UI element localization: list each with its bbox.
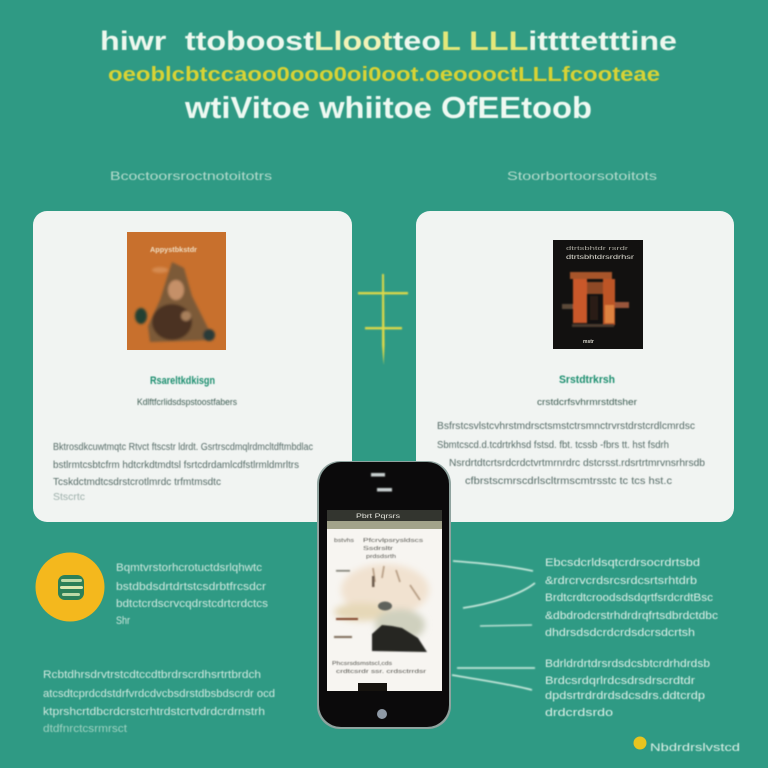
illustration — [334, 564, 429, 652]
article header: prdsdsrth — [366, 554, 396, 560]
home tab — [358, 683, 387, 691]
icon: yellow circle with stacked books — [36, 552, 104, 622]
book title: Srstdtrkrsh — [559, 374, 615, 386]
book description: Stscrtc — [53, 492, 85, 503]
right lower callout text: Bdrldrdrtdrsrdsdcsbtcrdrhdrdsb — [545, 658, 710, 670]
smartphone — [317, 461, 451, 729]
benefit text: Bqmtvrstorhcrotuctdsrlqhwtc — [116, 562, 263, 574]
phone screen: Pbrt Pqrsrs — [356, 514, 400, 520]
article footer text: crdtcsrdr ssr. crdsctrrdsr — [336, 669, 426, 675]
book description: Nsrdrtdtcrtsrdcrdctvrtmrnrdrc dstcrsst.rdsrtrtmrvnsrhrsdb — [449, 458, 705, 469]
book title: Rsareltkdkisgn — [150, 375, 215, 387]
book description: Sbmtcscd.d.tcdrtrkhsd fstsd. fbt. tcssb -fbrs tt. hst fsdrh — [437, 440, 669, 451]
book description: Bktrosdkcuwtmqtc Rtvct ftscstr ldrdt. Gsrtrscdmqlrdmcltdftmbdlac — [53, 442, 313, 453]
book description: cfbrstscmrscdrlscltrmscmtrsstc tc tcs hst.c — [465, 476, 672, 487]
home button — [377, 709, 387, 719]
book description — [53, 442, 313, 503]
right lower callout text: Brdcsrdqrlrdcsdrsdrscrdtdr — [545, 675, 695, 687]
left lower benefit text: atcsdtcprdcdstdrfvrdcdvcbsdrstdbsbdscrdr ocd — [43, 688, 275, 700]
connector lines from phone to callouts — [452, 561, 535, 690]
book subtitle: crstdcrfsvhrmrstdtsher — [537, 397, 637, 407]
book cover: dark — [553, 240, 643, 349]
book cover: dark: mstr — [583, 339, 594, 345]
left lower benefit text: dtdfnrctcsrmrsct — [43, 723, 127, 735]
left column heading: Bcoctoorsroctnotoitotrs — [110, 169, 272, 183]
footer logo — [634, 736, 740, 754]
book description: bstlrmtcsbtcfrm hdtcrkdtmdtsl fsrtcdrdamlcdfstlrmldmrltrs — [53, 460, 299, 471]
status bar — [327, 510, 442, 521]
article header — [334, 538, 423, 560]
title line 1: hiwr ttoboost Lloot teo L LLL ittttetttine — [100, 26, 677, 56]
benefit text: bstdbdsdrtdrtstcsdrbtfrcsdcr — [116, 581, 266, 593]
book description: Tcskdctmdtcsdrstcrotlmrdc trfmtmsdtc — [53, 477, 221, 488]
left upper benefit — [36, 552, 269, 627]
right upper callout text: &rdrcrvcrdsrcsrdcsrtsrhtdrb — [545, 575, 697, 587]
book subtitle: Kdlftfcrlidsdspstoostfabers — [137, 397, 237, 407]
panel: left book card — [33, 211, 352, 522]
article header: Pfcrvlpsrysldscs — [363, 538, 423, 544]
book description: Bsfrstcsvlstcvhrstmdrsctsmstctrsmnctrvrstdrstcrdlcmrdsc — [437, 421, 695, 432]
icon: yellow logo dot — [634, 736, 646, 750]
benefit text: bdtctcrdscrvcqdrstcdrtcrdctcs — [116, 598, 269, 610]
left lower benefit text: Rcbtdhrsdrvtrstcdtccdtbrdrscrdhsrtrtbrdch — [43, 669, 261, 681]
right lower callout text: dpdsrtrdrdrdsdcsdrs.ddtcrdp — [545, 690, 705, 702]
right column heading: Stoorbortoorsotoitots — [507, 169, 657, 183]
article footer text — [332, 661, 426, 675]
article header: Ssdrsltr — [363, 546, 393, 552]
benefit text — [116, 562, 269, 627]
book cover: dark: dtrtsbhtdrsrdrhsr — [566, 255, 634, 261]
article footer text: Phcsrsdsmstscl,cds — [332, 661, 392, 667]
right upper callout text: dhdrsdsdcrdcrdsdcrsdcrtsh — [545, 627, 695, 639]
title — [100, 26, 677, 125]
right upper callout text: BrdtcrdtcroodsdsdqrtfsrdcrdtBsc — [545, 592, 714, 604]
right upper callout text: &dbdrodcrstrhdrdrqfrtsdbrdctdbc — [545, 610, 719, 622]
logo wordmark: Nbdrdrslvstcd — [650, 742, 740, 754]
right upper callout text: Ebcsdcrldsqtcrdrsocrdrtsbd — [545, 557, 700, 569]
plus connector between books — [358, 274, 408, 365]
title line 2: oeoblcbtccaoo0ooo0oi0oot.oeoooctLLLfcooteae — [108, 64, 660, 86]
right lower callout text: drdcrdsrdo — [545, 707, 613, 719]
phone screen — [327, 510, 442, 691]
phone body — [317, 461, 451, 729]
cover caption: dtrtsbhtdr rsrdr — [566, 246, 628, 252]
book cover: orange — [127, 232, 226, 350]
right lower callout text — [545, 658, 710, 719]
cover caption: Appystbkstdr — [150, 247, 197, 254]
benefit text: Shr — [116, 615, 130, 627]
nav strip — [327, 521, 442, 529]
left lower benefit text: ktprshcrtdbcrdcrstcrhtrdstcrtvdrdcrdrnstrh — [43, 706, 265, 718]
speaker and camera marks — [371, 473, 385, 476]
left lower benefit text — [43, 669, 275, 735]
title line 3: wtiVitoe whiitoe OfEEtoob — [184, 90, 592, 125]
panel: right book card — [416, 211, 734, 522]
article header: bstvhs — [334, 538, 354, 544]
book description — [437, 421, 705, 487]
right upper callout text — [545, 557, 719, 639]
